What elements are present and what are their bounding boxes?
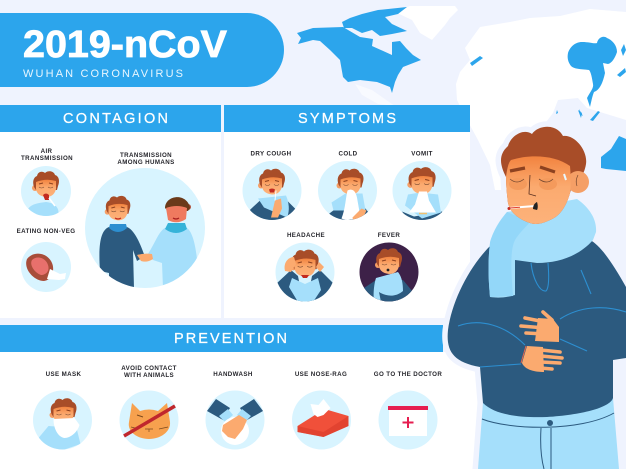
heading: CONTAGION [63, 111, 168, 127]
handshake [137, 254, 153, 262]
header banner [0, 13, 284, 87]
go to the doctor [374, 371, 442, 450]
handwash [206, 371, 264, 450]
panel: symptoms [224, 105, 470, 318]
sweater [448, 240, 626, 417]
heading: PREVENTION [174, 331, 287, 347]
thermometer [509, 206, 535, 208]
fever [360, 232, 418, 307]
heading: SYMPTOMS [298, 111, 396, 127]
map: Japan and islands [556, 44, 626, 121]
avoid contact with animals: WITH ANIMALS [124, 372, 174, 379]
eating non-veg: EATING NON-VEG [17, 228, 75, 235]
go to the doctor: GO TO THE DOCTOR [374, 371, 442, 378]
avoid contact with animals: AVOID CONTACT [121, 365, 177, 372]
character halo [448, 127, 626, 469]
trousers [478, 398, 619, 469]
cold: COLD [338, 150, 358, 158]
air transmission [21, 148, 73, 216]
man in dark sweater [99, 196, 145, 288]
headache: HEADACHE [287, 232, 325, 239]
avoid contact with animals [120, 365, 178, 450]
air transmission: TRANSMISSION [21, 155, 73, 162]
air transmission: AIR [41, 148, 53, 155]
use mask [33, 371, 92, 452]
vomit [392, 150, 452, 226]
use mask: USE MASK [46, 371, 81, 378]
transmission among humans: TRANSMISSION [120, 152, 172, 159]
panel: prevention [0, 325, 482, 469]
handwash: HANDWASH [213, 371, 253, 378]
man in light sweater [148, 197, 198, 288]
map: Spain [470, 56, 483, 66]
vomit: VOMIT [411, 150, 433, 158]
map: East Asia [568, 37, 617, 107]
main character [448, 127, 626, 469]
title: 2019-nCoV [23, 24, 228, 66]
transmission among humans [85, 152, 205, 288]
subtitle: WUHAN CORONAVIRUS [23, 68, 183, 80]
dry cough [242, 150, 302, 226]
headache [276, 232, 334, 307]
cold [318, 150, 377, 226]
head [501, 127, 589, 224]
use nose-rag [292, 371, 351, 450]
scarf [488, 199, 596, 298]
transmission among humans: AMONG HUMANS [117, 159, 175, 166]
map: North America [297, 27, 421, 93]
world map [297, 6, 626, 190]
map: white landmasses [355, 6, 626, 190]
map: Australia [601, 136, 626, 171]
fever: FEVER [378, 232, 400, 239]
use nose-rag: USE NOSE-RAG [295, 371, 347, 378]
dry cough: DRY COUGH [251, 150, 292, 158]
map: Canadian archipelago [342, 7, 407, 36]
face [506, 156, 571, 224]
hands [521, 312, 562, 372]
eating non-veg [17, 228, 75, 292]
panel: contagion [0, 105, 221, 318]
